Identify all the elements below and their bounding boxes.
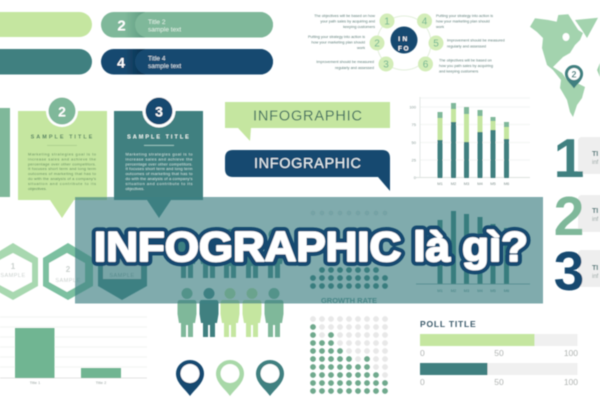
card 2: objectives. — [28, 186, 47, 191]
stacked bar chart: 25 — [412, 158, 417, 162]
pill 2 — [101, 12, 273, 38]
numbered list right: TI — [592, 265, 598, 272]
stacked bar chart: 0 — [414, 175, 417, 180]
stacked bar chart: M2 — [451, 181, 457, 186]
world map — [530, 14, 600, 117]
speech bubble navy — [225, 150, 390, 191]
location pins — [176, 360, 284, 396]
stacked bar chart: M6 — [504, 181, 510, 186]
column chart bottom left — [0, 317, 147, 385]
info circle diagram: 2 — [374, 38, 380, 50]
card 2: do with the analysis of a company's — [28, 176, 96, 181]
stacked bar chart: M3 — [464, 181, 470, 186]
card 3: objectives. — [126, 186, 144, 191]
card 2: It focuses short term and long term — [28, 166, 97, 171]
poll panel: 50 — [494, 348, 504, 358]
poll panel — [420, 319, 578, 387]
title banner: INFOGRAPHIC là gì? — [94, 223, 528, 270]
dot matrix under banner: GROWTH RATE — [321, 296, 377, 305]
info circle diagram: 5 — [433, 38, 439, 50]
poll panel: POLL TITLE — [420, 319, 476, 329]
stacked bar chart: 50 — [412, 140, 417, 145]
numbered list right: 3 — [554, 240, 584, 302]
info circle diagram: keeping customers — [343, 25, 375, 29]
hexagon 2 — [43, 243, 93, 300]
column chart bottom left: Title 2 — [96, 380, 107, 385]
bar chart under banner: M3 — [464, 288, 470, 293]
card 3: Marketing strategies goal is to — [126, 152, 193, 156]
world map: 2 — [571, 69, 577, 79]
info circle diagram — [308, 14, 505, 74]
hexagon 3 — [98, 243, 147, 300]
info circle diagram: and keeping customers — [439, 70, 478, 74]
pill 2: 2 — [117, 18, 126, 34]
speech bubble navy: INFOGRAPHIC — [254, 156, 361, 172]
stacked bar chart — [409, 97, 530, 186]
bar chart under banner: M6 — [504, 288, 510, 293]
stacked bar chart: 100 — [409, 104, 417, 110]
dot matrix under banner — [310, 210, 388, 305]
card 2: Marketing strategies goal is to — [28, 152, 97, 156]
numbered list right: inf — [592, 217, 599, 223]
card 2: SAMPLE TITLE — [31, 134, 94, 140]
numbered list right: 1 — [554, 127, 584, 189]
hexagon 1: 1 — [11, 262, 16, 271]
info circle diagram: 6 — [423, 60, 429, 70]
poll panel: 100 — [564, 377, 578, 387]
pill 1 — [0, 12, 92, 37]
bar chart under banner: M4 — [477, 288, 484, 293]
info circle diagram: 3 — [383, 60, 389, 70]
hexagon 2: 2 — [66, 265, 71, 274]
speech bubble light: INFOGRAPHIC — [253, 108, 362, 124]
card 3: situation and contribute to its — [126, 181, 192, 186]
numbered list right: TI — [592, 151, 598, 158]
info circle diagram: The objectives will be based on how — [314, 14, 375, 18]
numbered list right: TI — [592, 208, 598, 215]
info circle diagram: how your marketing plan should — [436, 20, 490, 24]
column chart bottom left: Title 1 — [30, 380, 41, 385]
pill 4: sample text — [148, 63, 181, 70]
card 1 edge — [0, 108, 10, 197]
people row upper — [178, 229, 284, 278]
numbered list right — [554, 127, 600, 302]
info circle diagram: IN — [398, 36, 410, 43]
bar chart under banner: M2 — [451, 288, 457, 293]
poll panel: 0 — [420, 348, 425, 358]
bar chart under banner: M5 — [490, 288, 497, 293]
info circle diagram: Putting your strategy into action is — [436, 14, 493, 18]
speech bubble light — [225, 102, 390, 141]
info circle diagram: The objectives will be based on — [439, 58, 492, 62]
card 3: percentage over other competitors. — [126, 161, 192, 166]
card 3: SAMPLE TITLE — [127, 134, 191, 140]
info circle diagram: work — [357, 46, 365, 50]
card 2: increase sales and achieve the — [28, 156, 97, 161]
stacked bar chart: M4 — [477, 181, 484, 186]
poll panel: 50 — [494, 377, 504, 387]
info circle diagram: 1 — [384, 16, 390, 28]
info circle diagram: work — [436, 25, 444, 29]
bar chart under banner — [416, 211, 530, 293]
stacked bar chart: 75 — [412, 122, 417, 127]
card 2: outcomes of marketing that has to — [28, 171, 97, 176]
numbered list right: inf — [592, 274, 599, 280]
card 2 — [18, 95, 107, 218]
pill 2: sample text — [148, 26, 181, 34]
poll panel: 0 — [420, 377, 425, 387]
hexagon 2: SAMPLE — [55, 278, 81, 284]
hexagon 1: SAMPLE — [0, 273, 26, 279]
pill 4 — [101, 49, 273, 74]
info circle diagram: FO — [398, 46, 410, 52]
pill 2: Title 2 — [148, 19, 166, 26]
poll panel: 100 — [564, 348, 578, 358]
card 3: It focuses short term and long term — [126, 166, 193, 171]
info circle diagram: regularly and assessed — [335, 66, 374, 70]
card 2: 2 — [58, 104, 66, 120]
info circle diagram: Improvement should be measured — [316, 60, 374, 64]
card 2: percentage over other competitors. — [28, 161, 96, 166]
card 3: 3 — [155, 104, 163, 120]
info circle diagram: Putting your strategy into action is — [308, 35, 365, 39]
info circle diagram: 4 — [422, 16, 428, 28]
stacked bar chart: M1 — [437, 181, 444, 186]
title banner — [75, 197, 543, 304]
card 3: increase sales and achieve the — [126, 156, 193, 161]
info circle diagram: Improvement should be measured — [447, 38, 505, 42]
hexagon 3: SAMPLE — [109, 273, 135, 279]
info circle diagram: how you path sales by acquiring — [439, 64, 493, 68]
info circle diagram: regularly and assessed — [447, 44, 486, 48]
card 3 — [114, 94, 203, 218]
card 3: do with the analysis of a company's — [126, 176, 192, 181]
card 2: situation and contribute to its — [28, 181, 96, 186]
numbered list right: 2 — [554, 185, 584, 247]
numbered list right: inf — [592, 160, 599, 166]
card 3: outcomes of marketing that has to — [126, 171, 193, 176]
people row lower — [178, 288, 284, 337]
info circle diagram: your path sales by acquiring and — [320, 20, 375, 24]
hexagon 1 — [0, 243, 38, 300]
pill 3 — [0, 49, 92, 74]
dot poll grid — [310, 316, 388, 394]
stacked bar chart: M5 — [490, 181, 497, 186]
pill 4: Title 4 — [148, 56, 166, 62]
info circle diagram: how your marketing plan should — [311, 40, 365, 44]
bar chart under banner: M1 — [437, 288, 444, 293]
title banner: INFOGRAPHIC là gì? — [94, 223, 528, 270]
pill 4: 4 — [117, 54, 125, 70]
